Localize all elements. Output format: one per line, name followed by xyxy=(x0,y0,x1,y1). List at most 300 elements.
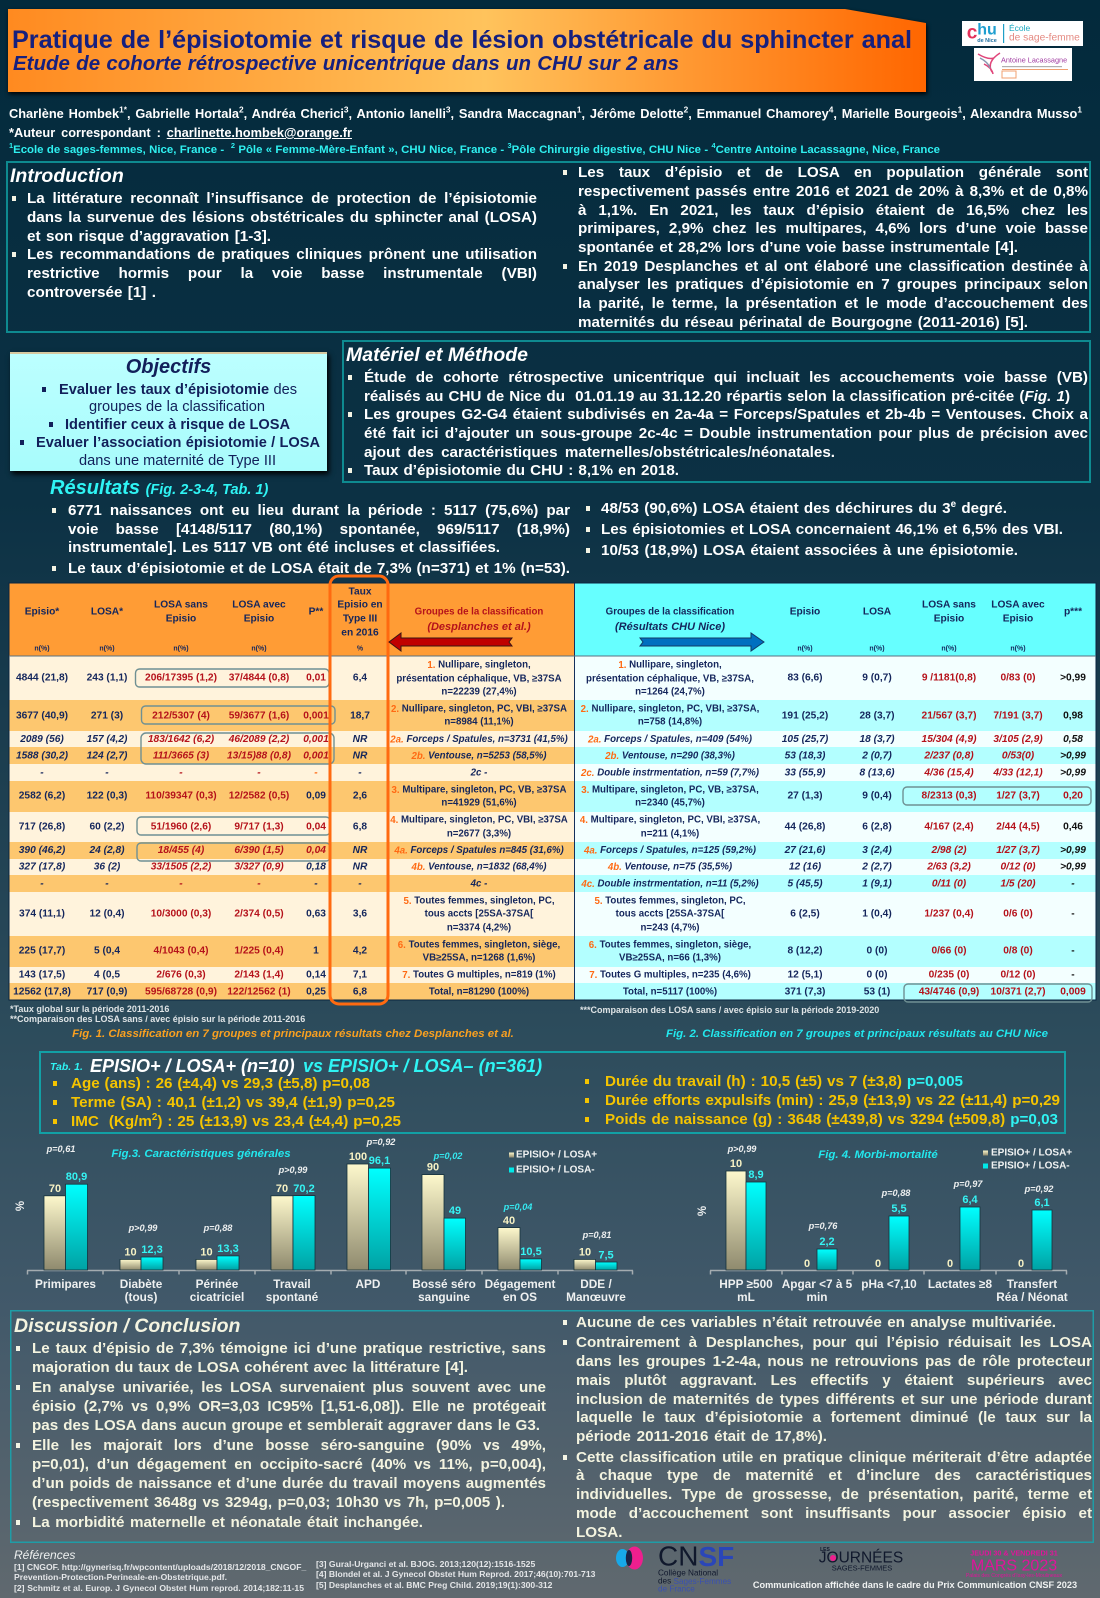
panel: tableau 1 xyxy=(39,1051,1066,1134)
row: groupe 4b: 2/63 (3,2) xyxy=(926,862,971,872)
panel: discussion / conclusion: mode d’accouchement sont insuffisants pour associer épisio et xyxy=(576,1505,1092,1522)
bars: DDE manoeuvre xyxy=(574,1259,617,1270)
row: groupe 7: 2/143 (1,4) xyxy=(234,970,284,980)
row: groupe 1 xyxy=(16,660,562,698)
row: groupe 5: n=3374 (4,2%) xyxy=(447,922,511,934)
row: groupe 4b: 33/1505 (2,2) xyxy=(151,862,212,872)
row: groupe 6: VB≥25SA, n=66 (1,3%) xyxy=(619,952,721,964)
row: total: Total, n=81290 (100%) xyxy=(429,986,529,998)
category labels: fig. 4: Réa / Néonat xyxy=(996,1290,1068,1304)
legend: fig. 3: EPISIO+ / LOSA- xyxy=(516,1164,595,1176)
bar: Apgar xyxy=(817,1249,837,1270)
heading: objectifs: Objectifs xyxy=(126,356,211,378)
row: groupe 2: 3677 (40,9) xyxy=(16,710,68,722)
category labels: fig. 3: DDE / xyxy=(580,1277,612,1291)
row: groupe 2a: 15/304 (4,9) xyxy=(922,734,977,745)
row: total: 12562 (17,8) xyxy=(13,986,71,998)
affiliations: 1Ecole de sages-femmes, Nice, France - 2 Pôle « Femme-Mère-Enfant », CHU Nice, France - 3Pôle Chirurgie digestive, CHU Nice - 4Centre Antoine Lacassagne, Nice, France xyxy=(9,141,940,156)
category labels: fig. 3: Diabète xyxy=(120,1277,163,1291)
p values: fig. 3: p=0,61 xyxy=(46,1144,75,1154)
row: groupe 2b xyxy=(16,750,547,762)
value labels: fig. 3: 7,5 xyxy=(598,1250,614,1262)
chart title: fig. 4: Fig. 4. Morbi-mortalité xyxy=(818,1149,938,1161)
panel: discussion / conclusion: p=0,01), d’un dégagement en occipito-sacré (40% vs 11%, p=0,004), xyxy=(32,1456,546,1473)
row: groupe 4: 9/717 (1,3) xyxy=(234,822,284,832)
panel: tableau 1: Durée efforts expulsifs (min) : 25,9 (±13,9) vs 22 (±11,4) p=0,29 xyxy=(605,1092,1060,1109)
corresponding author: *Auteur correspondant : charlinette.hombek@orange.fr xyxy=(9,125,352,140)
p values: fig. 4: p>0,99 xyxy=(727,1144,757,1154)
panel: discussion / conclusion: d’un poids de naissance et d’une durée du travail moyens augmentés xyxy=(32,1475,546,1492)
category labels: fig. 4: Lactates ≥8 xyxy=(928,1277,993,1291)
category labels: fig. 4: HPP ≥500 xyxy=(719,1277,773,1291)
row: groupe 3: 1/27 (3,7) xyxy=(996,790,1040,802)
row: groupe 2a: 105 (25,7) xyxy=(782,734,829,745)
table header: Desplanches: n(%) xyxy=(34,646,50,652)
row: groupe 1: présentation céphalique, VB, ≥37SA, xyxy=(586,674,754,684)
panel: résultats: instrumentale]. Les 5117 VB ont été incluses et classifiées. xyxy=(68,539,500,556)
panel: tableau 1: IMC (Kg/m2) : 25 (±13,9) vs 23,4 (±4,4) p=0,25 xyxy=(71,1112,401,1130)
row: groupe 5: 1 (0,4) xyxy=(862,908,892,920)
value labels: fig. 3: 13,3 xyxy=(217,1243,239,1255)
row: groupe 2 xyxy=(16,704,567,728)
value labels: fig. 4: 10 xyxy=(730,1158,742,1170)
row: groupe 7: 12 (5,1) xyxy=(787,970,823,980)
panel: discussion / conclusion: épisio (2,7% vs 0,9% OR=3,03 IC95% [1,51-6,08]). Elle ne protégeait xyxy=(32,1398,546,1415)
row: groupe 7: 4 (0,5 xyxy=(94,970,120,980)
highlight: taux épisio type III column xyxy=(330,576,388,1004)
row: groupe 6: 8 (12,2) xyxy=(787,946,823,956)
row: groupe 2a: NR xyxy=(353,734,368,745)
logo: CHU de Nice école de sage-femme: hu xyxy=(977,22,997,38)
row: groupe 1: n=22239 (27,4%) xyxy=(441,686,517,698)
value labels: fig. 3: 70 xyxy=(276,1183,288,1195)
row: groupe 4c xyxy=(40,878,487,890)
row: groupe 4c: 1 (9,1) xyxy=(862,878,892,890)
row: groupe 4: n=2677 (3,3%) xyxy=(447,828,511,840)
row: groupe 1: 206/17395 (1,2) xyxy=(145,672,217,684)
row: groupe 2: 2. Nullipare, singleton, PC, VBI, ≥37SA xyxy=(391,704,567,714)
panel: résultats: 10/53 (18,9%) LOSA étaient associées à une épisiotomie. xyxy=(601,542,1018,559)
row: groupe 4b xyxy=(19,862,547,872)
table header: Desplanches: Episio en xyxy=(337,600,383,610)
x axis xyxy=(27,1270,633,1274)
arrow: blue right xyxy=(640,633,764,651)
row: groupe 2c xyxy=(580,768,1086,778)
row: groupe 2c: >0,99 xyxy=(1060,768,1086,778)
value labels: fig. 3: 70,2 xyxy=(293,1183,315,1195)
legend: fig. 3 xyxy=(509,1150,597,1176)
logo: les journées sages-femmes: SAGES-FEMMES xyxy=(832,1564,892,1572)
row: groupe 2c: 2c. Double instrmentation, n=59 (7,7%) xyxy=(580,768,759,778)
row: groupe 5: 3,6 xyxy=(353,908,367,920)
category labels: fig. 3: APD xyxy=(356,1277,381,1291)
value labels: fig. 4: 0 xyxy=(804,1258,810,1270)
category labels: fig. 4: min xyxy=(807,1290,827,1304)
row: groupe 7: 7. Toutes G multiples, n=819 (1%) xyxy=(402,970,556,980)
panel: introduction: La littérature reconnaît l’insuffisance de protection de l’épisiotomie xyxy=(27,190,537,207)
table header: Desplanches: Groupes de la classification xyxy=(415,606,543,618)
row: total: 371 (7,3) xyxy=(785,986,825,998)
heading: références: Références xyxy=(14,1548,75,1562)
panel: discussion / conclusion: à chaque type de maternité et d’inclure des caractéristiques xyxy=(576,1467,1092,1484)
references: [4] Blondel et al. J Gynecol Obstet Hum Reprod. 2017;46(10):701-713 xyxy=(316,1569,595,1579)
panel: matériel et méthode xyxy=(342,340,1091,483)
row: groupe 4c: - xyxy=(358,878,362,890)
row: groupe 3: 110/39347 (0,3) xyxy=(145,790,217,802)
panel: résultats xyxy=(50,477,1063,577)
panel: introduction: à 1,1%. En 2021, les taux d’épisio étaient de 16,5% chez les xyxy=(578,202,1088,219)
row: groupe 4b: 2 (2,7) xyxy=(861,862,892,872)
row: groupe 2: n=758 (14,8%) xyxy=(638,716,702,728)
value labels: fig. 4 xyxy=(730,1158,1050,1270)
category labels: fig. 3: Travail xyxy=(273,1277,311,1291)
category labels: fig. 3: Primipares xyxy=(35,1277,96,1291)
title: Pratique de l’épisiotomie et risque de lésion obstétricale du sphincter anal xyxy=(12,26,912,54)
row: groupe 4a: 390 (46,2) xyxy=(19,845,66,856)
row: groupe 3: n=41929 (51,6%) xyxy=(441,798,517,808)
row: groupe 2: 2. Nullipare, singleton, PC, VBI, ≥37SA, xyxy=(581,704,760,714)
row: groupe 4a: NR xyxy=(353,845,368,856)
panel: discussion / conclusion: laquelle le taux d’épisiotomie a fortement diminué (le taux sur la xyxy=(576,1409,1092,1426)
panel: matériel et méthode: Les groupes G2-G4 étaient subdivisés en 2a-4a = Forceps/Spatules et 2b-4b = Ventouses. Choix a xyxy=(364,406,1088,423)
logo: mars 2023 xyxy=(966,1548,1063,1579)
row: groupe 2a: 183/1642 (6,2) xyxy=(148,734,215,745)
row: groupe 6 xyxy=(589,940,1075,964)
row: groupe 4c: 0/11 (0) xyxy=(932,878,967,890)
row: groupe 7: 2/676 (0,3) xyxy=(156,970,206,980)
row: groupe 3: 2,6 xyxy=(353,790,367,802)
panel: objectifs: Identifier ceux à risque de LOSA xyxy=(65,417,290,433)
row: groupe 2 xyxy=(581,704,1083,728)
p values: fig. 4 xyxy=(727,1144,1054,1231)
panel: objectifs: dans une maternité de Type III xyxy=(79,453,276,469)
row: groupe 4: 6 (2,8) xyxy=(862,822,892,832)
row: groupe 1: 0,01 xyxy=(306,672,326,684)
row: groupe 6: 225 (17,7) xyxy=(19,946,65,956)
legend: fig. 3: EPISIO+ / LOSA+ xyxy=(516,1150,597,1160)
row: groupe 2a: 157 (4,2) xyxy=(87,734,128,745)
row: groupe 2b: 0/53(0) xyxy=(1002,750,1035,762)
panel: introduction: primipares, 2,9% chez les multipares, 4,6% lors d’une voie basse xyxy=(578,220,1088,237)
row: groupe 4: 0,46 xyxy=(1063,822,1083,832)
category labels: fig. 3 xyxy=(35,1277,626,1304)
panel: objectifs: Evaluer l’association épisiotomie / LOSA xyxy=(36,435,320,451)
panel: résultats: 6771 naissances ont eu lieu durant la période : 5117 (75,6%) par xyxy=(68,502,570,519)
logo: CNSF: Collège National xyxy=(658,1568,718,1578)
table header: Desplanches: Episio* xyxy=(25,606,59,618)
category labels: fig. 4: Transfert xyxy=(1007,1277,1057,1291)
category labels: fig. 4 xyxy=(719,1277,1068,1304)
row: groupe 7 xyxy=(19,970,556,980)
value labels: fig. 4: 0 xyxy=(1018,1258,1024,1270)
row: groupe 2: 18,7 xyxy=(350,710,370,722)
panel: introduction: restrictive hormis pour la voie basse instrumentale (VBI) xyxy=(27,265,537,282)
value labels: fig. 3: 10 xyxy=(579,1246,591,1258)
logo: les journées sages-femmes: LES xyxy=(820,1547,831,1553)
panel: introduction: et son risque d’aggravation [1-3]. xyxy=(27,228,271,245)
row: groupe 1: 6,4 xyxy=(353,672,367,684)
table header: Desplanches: LOSA avec xyxy=(232,600,286,610)
row: groupe 4c: 1/5 (20) xyxy=(1000,878,1036,890)
bars: périnée xyxy=(196,1256,239,1270)
panel: discussion / conclusion: LOSA. xyxy=(576,1524,622,1541)
x axis xyxy=(710,1270,1067,1274)
logo: CHU de Nice école de sage-femme: de Nice xyxy=(977,38,997,44)
row: groupe 2c: - xyxy=(105,768,109,778)
row: groupe 4a xyxy=(583,845,1086,856)
legend: fig. 4 xyxy=(983,1148,1072,1172)
row: groupe 2: 59/3677 (1,6) xyxy=(229,710,289,722)
row: groupe 2a: 46/2089 (2,2) xyxy=(228,734,290,745)
row: total: Total, n=5117 (100%) xyxy=(623,986,717,998)
row: groupe 2c: 2c - xyxy=(470,768,487,778)
row: groupe 5: 6 (2,5) xyxy=(790,908,820,920)
row: groupe 2: 271 (3) xyxy=(91,710,123,722)
row: groupe 3: 3. Multipare, singleton, PC, VB, ≥37SA xyxy=(392,784,566,796)
panel: résultats: 48/53 (90,6%) LOSA étaient des déchirures du 3e degré. xyxy=(601,499,1007,517)
row: groupe 2c: - xyxy=(257,768,261,778)
row: groupe 7: 7,1 xyxy=(353,970,367,980)
row: groupe 4a: 3 (2,4) xyxy=(862,845,892,856)
bar: transfert xyxy=(1032,1210,1052,1270)
row: groupe 2c: 33 (55,9) xyxy=(785,768,826,778)
value labels: fig. 4: 5,5 xyxy=(891,1203,907,1215)
row: groupe 4b: 4b. Ventouse, n=75 (35,5%) xyxy=(607,862,732,872)
row: groupe 4a: 2/98 (2) xyxy=(930,845,967,856)
value labels: fig. 3: 10,5 xyxy=(520,1246,542,1258)
table header: Desplanches: Episio xyxy=(166,614,196,624)
row: groupe 4: 60 (2,2) xyxy=(89,822,125,832)
row: groupe 2c: 4/36 (15,4) xyxy=(923,768,974,778)
row: total: 122/12562 (1) xyxy=(227,986,291,998)
references: [2] Schmitz et al. Europ. J Gynecol Obstet Hum reprod. 2014;182:11-15 xyxy=(14,1583,304,1593)
row: groupe 2: 212/5307 (4) xyxy=(152,710,210,722)
table header: Desplanches: n(%) xyxy=(99,646,115,652)
row: groupe 3: 2582 (6,2) xyxy=(19,790,65,802)
value labels: fig. 3: 12,3 xyxy=(141,1244,163,1256)
table header: CHU Nice: LOSA sans xyxy=(922,600,976,610)
legend: fig. 4: EPISIO+ / LOSA+ xyxy=(991,1148,1072,1158)
logo: CNSF: des Sages-Femmes xyxy=(658,1576,731,1586)
row: groupe 2a: 0,001 xyxy=(303,734,329,745)
row: groupe 3 xyxy=(581,784,1083,808)
row: groupe 3: 9 (0,4) xyxy=(862,790,892,802)
row: groupe 2c xyxy=(40,768,487,778)
value labels: fig. 4: 6,4 xyxy=(962,1194,979,1206)
panel: introduction: controversée [1] . xyxy=(27,284,156,301)
row: groupe 3: n=2340 (45,7%) xyxy=(635,798,705,808)
row: groupe 7: 0/12 (0) xyxy=(1000,970,1036,980)
logo: CHU de Nice école de sage-femme: de sage-femme xyxy=(1009,32,1080,44)
row: groupe 5: 12 (0,4) xyxy=(89,908,125,920)
row: groupe 4a: 27 (21,6) xyxy=(784,845,826,856)
row: groupe 7: 0/235 (0) xyxy=(929,970,969,980)
panel: matériel et méthode: été fait ici d’ajouter un sous-groupe 2c-4c = Double instrumentation pour plus de précision avec xyxy=(364,425,1088,442)
table header: CHU Nice xyxy=(606,600,1082,652)
p values: fig. 3: p=0,81 xyxy=(582,1230,611,1240)
value labels: fig. 4: 2,2 xyxy=(819,1236,835,1248)
row: groupe 1: 1. Nullipare, singleton, xyxy=(427,660,531,670)
row: groupe 2b: 111/3665 (3) xyxy=(153,750,210,762)
panel: discussion / conclusion: Elle les majorait lors d’une bosse séro-sanguine (90% vs 49%, xyxy=(32,1437,546,1454)
panel: matériel et méthode: ajout des caractéristiques maternelles/obstétricales/néonatales. xyxy=(364,444,835,461)
table header: Desplanches: n(%) xyxy=(251,646,267,652)
row: groupe 2c: 8 (13,6) xyxy=(859,768,895,778)
heading: introduction: Introduction xyxy=(10,165,124,187)
row: groupe 1: 243 (1,1) xyxy=(87,672,127,684)
p values: fig. 3: p>0,99 xyxy=(128,1223,158,1233)
table header: Desplanches: P** xyxy=(309,606,323,618)
references: [5] Desplanches et al. BMC Preg Child. 2019;19(1):300-312 xyxy=(316,1580,552,1590)
logo: CHU de Nice école de sage-femme: École xyxy=(1009,23,1031,33)
heading: tab 1 xyxy=(50,1056,542,1076)
value labels: fig. 3: 70 xyxy=(49,1183,61,1195)
logo: Antoine Lacassagne xyxy=(974,48,1072,81)
authors and affiliations xyxy=(9,105,1082,156)
panel: introduction: En 2019 Desplanches et al ont élaboré une classification destinée à xyxy=(578,258,1088,275)
row: groupe 4c: - xyxy=(179,878,183,890)
row: groupe 4 xyxy=(19,814,568,840)
row: total: 717 (0,9) xyxy=(87,986,127,998)
logo: mars 2023: JEUDI 30 & VENDREDI 31 xyxy=(970,1548,1058,1558)
panel: résultats: Le taux d’épisiotomie et de LOSA était de 7,3% (n=371) et 1% (n=53). xyxy=(68,560,570,577)
row: groupe 6: 0 (0) xyxy=(867,946,887,956)
row: groupe 2b xyxy=(604,750,1086,762)
table header: CHU Nice: n(%) xyxy=(869,646,885,652)
row: groupe 6: - xyxy=(1071,946,1075,956)
row: groupe 3: 122 (0,3) xyxy=(87,790,127,802)
logo: CNSF xyxy=(616,1540,734,1594)
table: CHU Nice (fig. 2) xyxy=(574,583,1096,1000)
row: groupe 4a: 1/27 (3,7) xyxy=(996,845,1040,856)
panel: discussion / conclusion: (respectivement 3648g vs 3294g, p=0,03; 10h30 vs 7h, p=0,005 ). xyxy=(32,1494,505,1511)
row: groupe 5: 374 (11,1) xyxy=(19,908,65,920)
value labels: fig. 4: 0 xyxy=(875,1258,881,1270)
row: groupe 2a: 0,58 xyxy=(1063,734,1083,745)
panel: discussion / conclusion: majoration du taux de LOSA cohérent avec la littérature [4]. xyxy=(32,1359,468,1376)
panel: introduction xyxy=(6,161,1091,333)
logo: Antoine Lacassagne: Antoine Lacassagne xyxy=(1001,56,1067,64)
logo: les journées sages-femmes xyxy=(819,1547,903,1572)
value labels: fig. 4: 0 xyxy=(947,1258,953,1270)
row: groupe 4a: 6/390 (1,5) xyxy=(234,845,284,856)
legend: fig. 4: EPISIO+ / LOSA- xyxy=(991,1160,1070,1172)
row: groupe 1: 83 (6,6) xyxy=(787,672,823,684)
row: groupe 5: 1/237 (0,4) xyxy=(924,908,974,920)
row: groupe 2a: 2a. Forceps / Spatules, n=3731 (41,5%) xyxy=(389,734,568,745)
panel: discussion / conclusion: Cette classification utile en pratique clinique mériterait d’être adaptée xyxy=(576,1449,1092,1466)
row: groupe 1: 1. Nullipare, singleton, xyxy=(618,660,722,670)
table header: CHU Nice: Groupes de la classification xyxy=(606,606,734,618)
heading: tab 1: Tab. 1. xyxy=(50,1061,83,1073)
row: groupe 4: 0,04 xyxy=(306,822,326,832)
row: groupe 5: 5. Toutes femmes, singleton, PC, xyxy=(403,896,555,906)
arrow: red left xyxy=(389,633,512,651)
heading: tab 1: vs EPISIO+ / LOSA– (n=361) xyxy=(303,1056,542,1076)
row: groupe 4c: - xyxy=(40,878,44,890)
logo: CHU de Nice école de sage-femme: c xyxy=(967,22,978,44)
credit line: Communication affichée dans le cadre du Prix Communication CNSF 2023 xyxy=(753,1580,1077,1590)
table header: Desplanches: (Desplanches et al.) xyxy=(427,621,531,633)
chart: fig. 4 morbi-mortalité xyxy=(697,1144,1072,1304)
row: groupe 1: 9 /1181(0,8) xyxy=(922,672,976,684)
table header: CHU Nice: n(%) xyxy=(797,646,813,652)
row: groupe 2a: 2a. Forceps / Spatules, n=409 (54%) xyxy=(587,734,752,745)
chart title: fig. 3: Fig.3. Caractéristiques générales xyxy=(111,1148,291,1160)
panel: introduction: dans la survenue des lésions obstétricales du sphincter anal (LOSA) xyxy=(27,209,537,226)
p values: fig. 3: p>0,99 xyxy=(278,1165,308,1175)
table header: Desplanches: Episio xyxy=(244,614,274,624)
panel: introduction: maternités du réseau périnatal de Bourgogne (2011-2016) [5]. xyxy=(578,314,1028,331)
row: groupe 2c: - xyxy=(179,768,183,778)
row: groupe 4 xyxy=(580,814,1083,840)
row: groupe 4b: 36 (2) xyxy=(94,862,121,872)
heading: discussion / conclusion: Discussion / Conclusion xyxy=(14,1315,240,1337)
table header: CHU Nice: Episio xyxy=(1003,614,1033,624)
row: groupe 5: 10/3000 (0,3) xyxy=(151,908,211,920)
row: total: 6,8 xyxy=(353,986,367,998)
highlight boxes on significant rows xyxy=(136,669,1092,1002)
row: groupe 2c: - xyxy=(358,768,362,778)
row: groupe 6: 1/225 (0,4) xyxy=(234,946,284,956)
panel: résultats: Les épisiotomies et LOSA concernaient 46,1% et 6,5% des VBI. xyxy=(601,521,1063,538)
bars: travail spontané xyxy=(271,1196,315,1270)
row: groupe 4: 4. Multipare, singleton, PC, VBI, ≥37SA, xyxy=(580,814,760,826)
row: groupe 3: 8/2313 (0,3) xyxy=(922,790,976,802)
row: groupe 7: - xyxy=(1071,970,1075,980)
row: groupe 1: n=1264 (24,7%) xyxy=(635,686,705,698)
category labels: fig. 3: spontané xyxy=(266,1290,319,1304)
row: groupe 2c: 4/33 (12,1) xyxy=(992,768,1043,778)
row: groupe 4b xyxy=(607,862,1086,872)
caption: fig. 2: Fig. 2. Classification en 7 groupes et principaux résultats au CHU Nice xyxy=(666,1028,1049,1040)
row: groupe 2a: 2089 (56) xyxy=(19,734,64,745)
panel: discussion / conclusion: Contrairement à Desplanches, pour qui l’épisio réduisait les LOSA xyxy=(576,1334,1092,1351)
panel: introduction: respectivement passés entre 2016 et 2021 de 20% à 8,3% et de 0,8% xyxy=(578,183,1088,200)
row: groupe 4: 2/44 (4,5) xyxy=(996,822,1040,832)
row: groupe 2: n=8984 (11,1%) xyxy=(444,716,514,728)
category labels: fig. 3: en OS xyxy=(503,1290,537,1304)
panel: tableau 1: Age (ans) : 26 (±4,4) vs 29,3 (±5,8) p=0,08 xyxy=(71,1075,370,1092)
category labels: fig. 3: Périnée xyxy=(196,1277,239,1291)
category labels: fig. 3: Dégagement xyxy=(485,1277,555,1291)
row: groupe 4a: 0,04 xyxy=(306,845,326,856)
heading: tab 1: EPISIO+ / LOSA+ (n=10) xyxy=(90,1056,295,1076)
panel: discussion / conclusion: mais plutôt aggravant. Les effectifs y étaient supérieurs avec xyxy=(576,1372,1092,1389)
row: groupe 7: 0,14 xyxy=(306,970,326,980)
table header: CHU Nice: p*** xyxy=(1064,606,1082,618)
panel: introduction: Les recommandations de pratiques cliniques prônent une utilisation xyxy=(27,246,537,263)
row: groupe 4c: - xyxy=(257,878,261,890)
p values: fig. 4: p=0,92 xyxy=(1024,1184,1054,1194)
row: groupe 4b: >0,99 xyxy=(1060,862,1086,872)
panel: matériel et méthode: Taux d’épisiotomie du CHU : 8,1% en 2018. xyxy=(364,462,679,479)
p values: fig. 3: p=0,04 xyxy=(503,1202,532,1212)
row: groupe 4c xyxy=(580,878,1075,890)
row: groupe 7: 0 (0) xyxy=(867,970,887,980)
subtitle: Etude de cohorte rétrospective unicentrique dans un CHU sur 2 ans xyxy=(13,52,679,75)
row: groupe 6: 0/8 (0) xyxy=(1003,946,1033,956)
row: groupe 7: 7. Toutes G multiples, n=235 (4,6%) xyxy=(589,970,751,980)
panel: discussion / conclusion: Aucune de ces variables n’était retrouvée en analyse multivariée. xyxy=(576,1314,1056,1331)
category labels: fig. 4: mL xyxy=(737,1290,755,1304)
row: groupe 2b: 13/15)88 (0,8) xyxy=(227,750,292,762)
row: groupe 2: 28 (3,7) xyxy=(859,710,895,722)
logo: mars 2023: MARS 2023 xyxy=(971,1558,1057,1574)
row: groupe 1: 0/83 (0) xyxy=(1000,672,1036,684)
row: groupe 4: 6,8 xyxy=(353,822,367,832)
category labels: fig. 3: sanguine xyxy=(418,1290,470,1304)
